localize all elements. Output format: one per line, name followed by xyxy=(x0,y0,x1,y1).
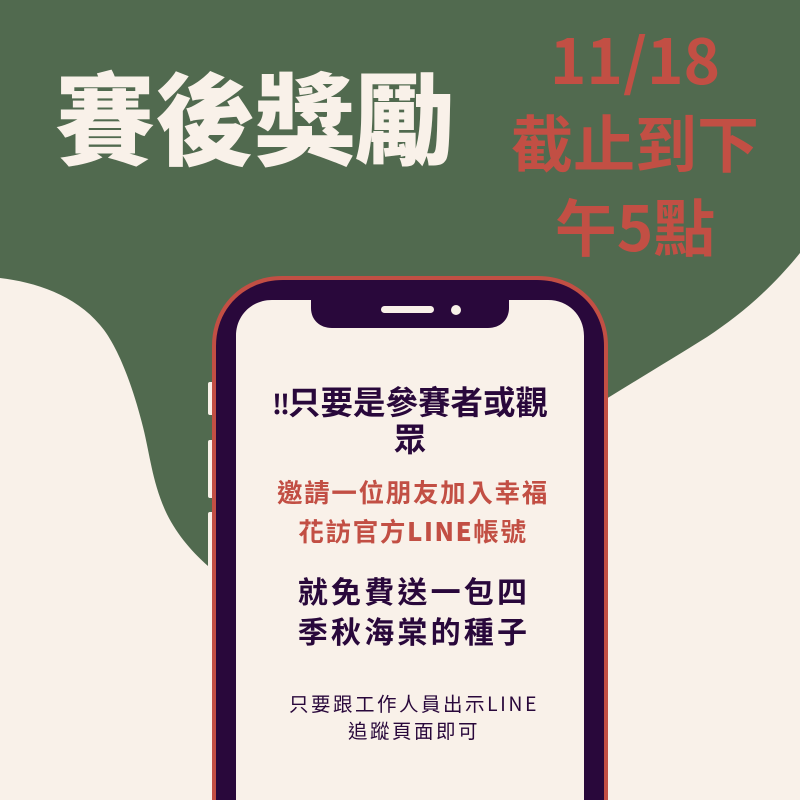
text block: free seeds: 就免費送一包四 xyxy=(298,568,530,612)
text block: show line page: 只要跟工作人員出示LINE xyxy=(289,688,539,717)
icon: phone side buttons xyxy=(208,382,216,572)
text block: eligibility xyxy=(272,377,548,460)
shape: right cream blob xyxy=(606,253,800,800)
text block: eligibility: 眾 xyxy=(394,414,426,460)
text block: free seeds xyxy=(298,568,530,652)
deadline callout: 11/18 xyxy=(550,12,720,102)
text block: invite a friend: 花訪官方LINE帳號 xyxy=(298,512,528,548)
deadline callout: 午5點 xyxy=(555,179,715,269)
deadline callout xyxy=(511,12,759,269)
deadline callout: 截止到下 xyxy=(511,95,759,185)
text block: invite a friend xyxy=(277,473,549,548)
title: 賽後獎勵 xyxy=(55,41,455,186)
text block: show line page xyxy=(289,688,539,744)
text block: invite a friend: 邀請一位朋友加入幸福 xyxy=(277,473,549,510)
icon: phone xyxy=(212,276,608,800)
shape: left cream blob xyxy=(0,278,216,800)
text block: show line page: 追蹤頁面即可 xyxy=(348,715,480,744)
text block: free seeds: 季秋海棠的種子 xyxy=(298,608,530,652)
text block: eligibility: !!只要是參賽者或觀 xyxy=(272,377,548,424)
